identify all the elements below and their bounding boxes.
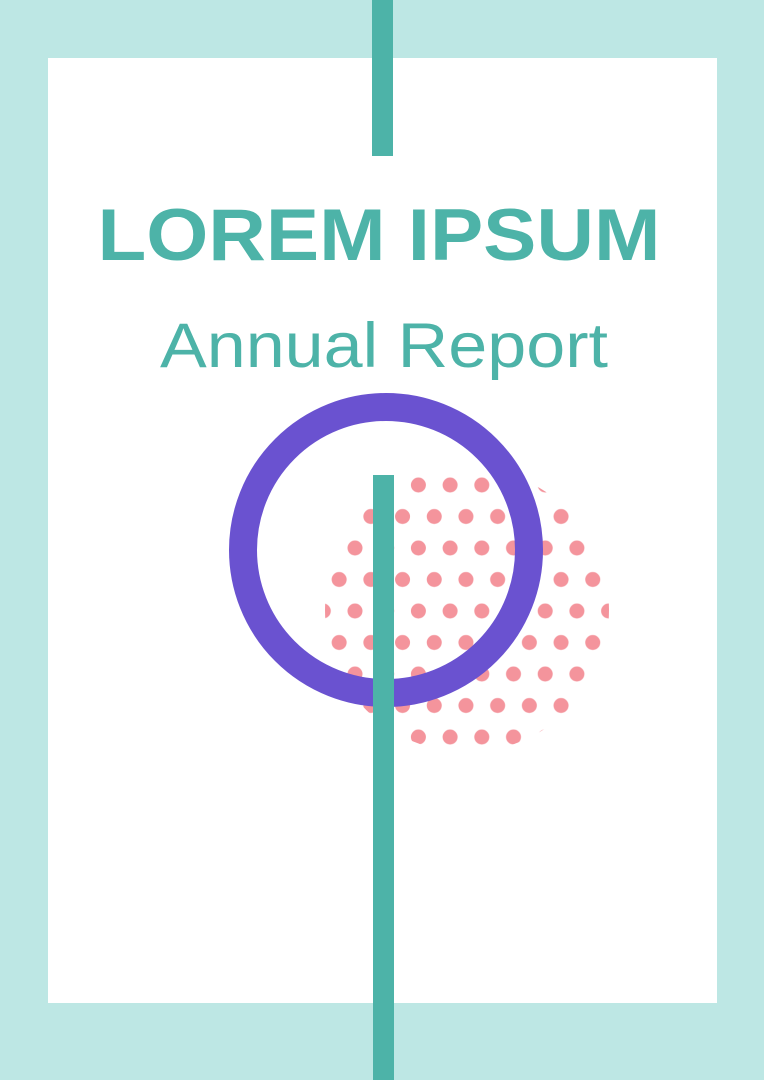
dot pattern: [325, 477, 609, 745]
top teal bar: [372, 0, 393, 156]
title: LOREM IPSUM: [98, 195, 660, 276]
white panel: [48, 58, 717, 1003]
bottom teal bar: [373, 475, 394, 1080]
subtitle: Annual Report: [160, 311, 609, 381]
purple ring: [243, 407, 529, 693]
